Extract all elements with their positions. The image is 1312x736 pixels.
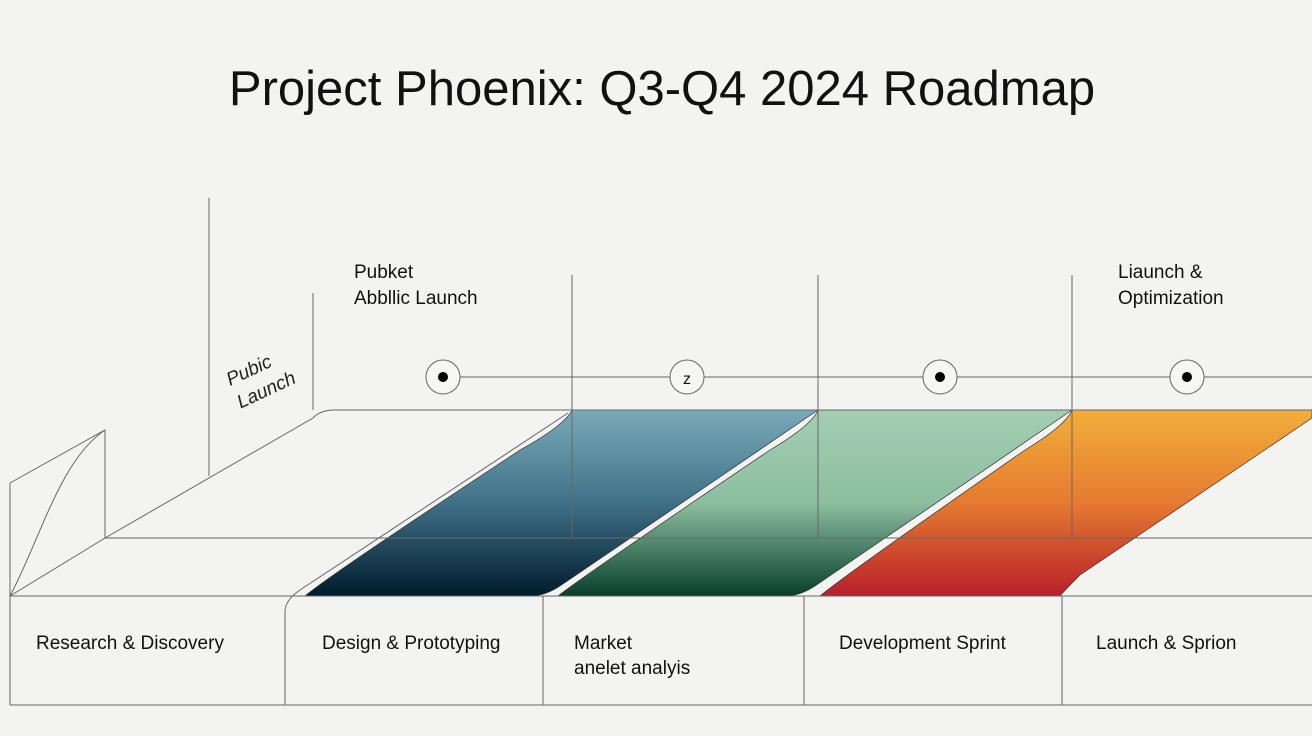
- phase labels: Development Sprint: [839, 633, 1007, 654]
- label: launch optimization: Liaunch &: [1118, 262, 1203, 283]
- phase labels: [36, 633, 1236, 679]
- label: public launch: Abbllic Launch: [354, 288, 478, 309]
- phase band: orange: [820, 410, 1312, 596]
- phase labels: Design & Prototyping: [322, 633, 500, 654]
- phase labels: anelet analyis: [574, 658, 690, 679]
- phase labels: Launch & Sprion: [1096, 633, 1236, 654]
- label: rotated public launch: Launch: [234, 368, 299, 413]
- label: public launch: Pubket: [354, 262, 414, 283]
- phase labels: Research & Discovery: [36, 633, 224, 654]
- phase band: blue: [305, 410, 818, 596]
- phase band: green: [558, 410, 1072, 596]
- title: Project Phoenix: Q3-Q4 2024 Roadmap: [229, 62, 1095, 116]
- phase labels: Market: [574, 633, 633, 654]
- platform outline: [10, 198, 1312, 705]
- milestone markers: [426, 360, 1204, 394]
- label: rotated public launch: Pubic: [223, 351, 276, 391]
- milestone markers: z: [683, 371, 691, 388]
- label: launch optimization: Optimization: [1118, 288, 1224, 309]
